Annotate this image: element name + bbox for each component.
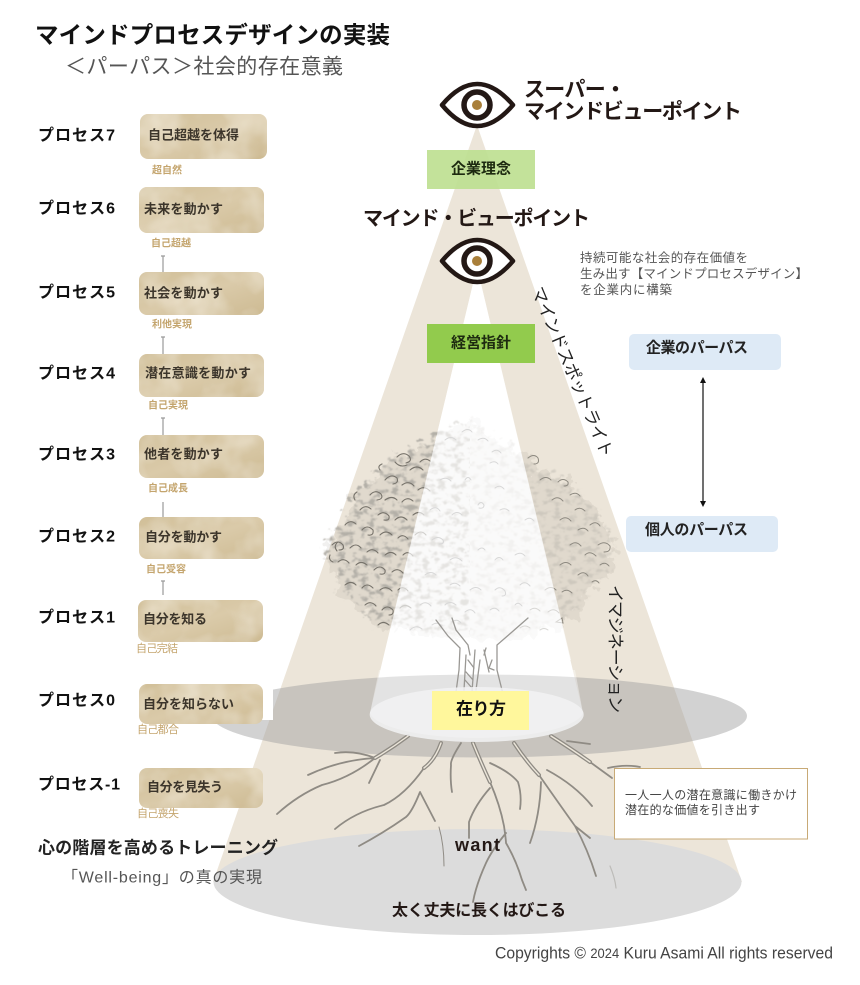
process 1 box: 自分を知る: [143, 612, 207, 626]
light overlay of the inner beam over the ellipse: [370, 670, 583, 738]
want label: want: [454, 835, 500, 855]
state: 自己完結: 自己完結: [136, 642, 178, 655]
process 5 box: 社会を動かす: [144, 286, 223, 300]
state: 自己成長: 自己成長: [148, 482, 188, 494]
personal purpose box: [626, 516, 778, 552]
state: 自己実現: 自己実現: [148, 398, 188, 412]
super mind viewpoint heading: [524, 78, 742, 124]
super mind viewpoint heading: スーパー・: [524, 78, 626, 102]
state: 自己喪失: 自己喪失: [137, 806, 179, 820]
corporate purpose box: 企業のパーパス: [646, 338, 748, 356]
process -1 box: [139, 768, 263, 808]
roots caption: 太く丈夫に長くはびこる: [392, 900, 566, 920]
connector 4 to 5: [161, 337, 165, 354]
process 1 box: [138, 600, 263, 642]
process 5 label: プロセス5: [38, 284, 115, 302]
connector 1 to 2: [161, 581, 165, 595]
icon: mind eye: [442, 240, 513, 282]
icon: super mind eye: [442, 84, 513, 126]
canopy shading right: [470, 425, 614, 642]
personal purpose box: 個人のパーパス: [645, 522, 748, 538]
process 4 label: プロセス4: [38, 364, 115, 382]
mind viewpoint heading: マインド・ビューポイント: [363, 207, 590, 230]
tree leaf curls: [329, 454, 430, 625]
state: 自己都合: 自己都合: [137, 723, 179, 736]
corporate philosophy box: 企業理念: [451, 160, 511, 178]
callout: 潜在的な価値を引き出す: [625, 802, 760, 817]
process 3 label: プロセス3: [38, 446, 115, 464]
corporate philosophy box: [427, 150, 535, 189]
process ladder: [38, 114, 267, 820]
tree leaf curls right side: [520, 456, 610, 630]
centre roots: [469, 763, 526, 902]
connector 2 to 3: [162, 502, 164, 517]
process -1 box: 自分を見失う: [147, 780, 223, 794]
bottom grey ellipse: soil: [214, 829, 742, 935]
state: 自己受容: 自己受容: [146, 562, 186, 576]
imagination rotated label: イマジネーション: [606, 585, 624, 713]
management policy box: [427, 324, 535, 363]
white notch behind process 0: [139, 672, 273, 720]
process 7 label: プロセス7: [38, 126, 115, 144]
root fragment: [439, 827, 444, 866]
state: 超自然: 超自然: [152, 164, 182, 176]
left roots: [277, 743, 461, 846]
process 0 box: 自分を知らない: [143, 696, 234, 712]
subtitle: ＜パーパス＞社会的存在意義: [65, 56, 343, 78]
process 5 box: [139, 272, 264, 315]
description text: を企業内に構築: [580, 282, 672, 297]
connector 5 to 6: [161, 256, 165, 272]
corporate purpose box: [629, 334, 781, 370]
arrow: corporate to personal purpose: [700, 377, 706, 507]
process 7 box: [140, 114, 267, 159]
state: 利他実現: 利他実現: [152, 318, 192, 330]
process 6 box: 未来を動かす: [144, 202, 223, 216]
copyright: Copyrights © 2024 Kuru Asami All rights reserved: [495, 944, 833, 962]
title: マインドプロセスデザインの実装: [35, 21, 390, 48]
state: 自己超越: 自己超越: [151, 236, 191, 250]
well-being subheading: 「Well-being」の真の実現: [62, 868, 262, 886]
super mind viewpoint heading: マインドビューポイント: [524, 100, 742, 124]
right roots: [530, 741, 640, 876]
inner white ellipse: [370, 687, 584, 742]
process 6 box: [139, 187, 264, 233]
canopy base tint: [327, 425, 614, 642]
spotlight beams: [213, 125, 742, 882]
description text: [580, 250, 808, 297]
callout: [614, 768, 808, 839]
process 4 box: 潜在意識を動かす: [145, 366, 251, 380]
root thick proximal segments: [375, 736, 590, 782]
callout: 一人一人の潜在意識に働きかけ: [625, 788, 797, 802]
process 3 box: [139, 435, 264, 478]
process 2 box: 自分を動かす: [145, 530, 222, 544]
tree trunk and limbs: [436, 618, 528, 694]
tree leaf curls centre: [410, 430, 534, 630]
process 7 box: 自己超越を体得: [148, 128, 239, 142]
process 0 box: [139, 684, 263, 724]
process 6 label: プロセス6: [38, 200, 115, 218]
tree roots: [277, 736, 640, 902]
mid grey ellipse: being level: [212, 674, 747, 758]
process -1 label: プロセス-1: [38, 776, 120, 794]
process 1 label: プロセス1: [38, 608, 115, 626]
inner beam fade over the canopy: [383, 267, 571, 660]
tree illustration: [327, 425, 614, 642]
description text: 生み出す【マインドプロセスデザイン】: [580, 266, 808, 281]
process 2 box: [139, 517, 264, 559]
faint root fragment: [610, 866, 616, 888]
being box: [432, 691, 529, 730]
root inner highlights: [375, 736, 590, 782]
management policy text: 経営指針: [451, 334, 511, 352]
process 2 label: プロセス2: [38, 528, 115, 546]
training heading: 心の階層を高めるトレーニング: [38, 838, 278, 858]
connector 3 to 4: [161, 418, 165, 435]
mind spotlight rotated label: マインドスポットライト: [528, 284, 616, 460]
process 0 label: プロセス0: [38, 692, 115, 710]
being box: 在り方: [456, 698, 506, 718]
description text: 持続可能な社会的存在価値を: [580, 250, 748, 265]
process 3 box: 他者を動かす: [144, 446, 223, 462]
canopy shading left: [327, 425, 470, 640]
process 4 box: [139, 354, 264, 397]
